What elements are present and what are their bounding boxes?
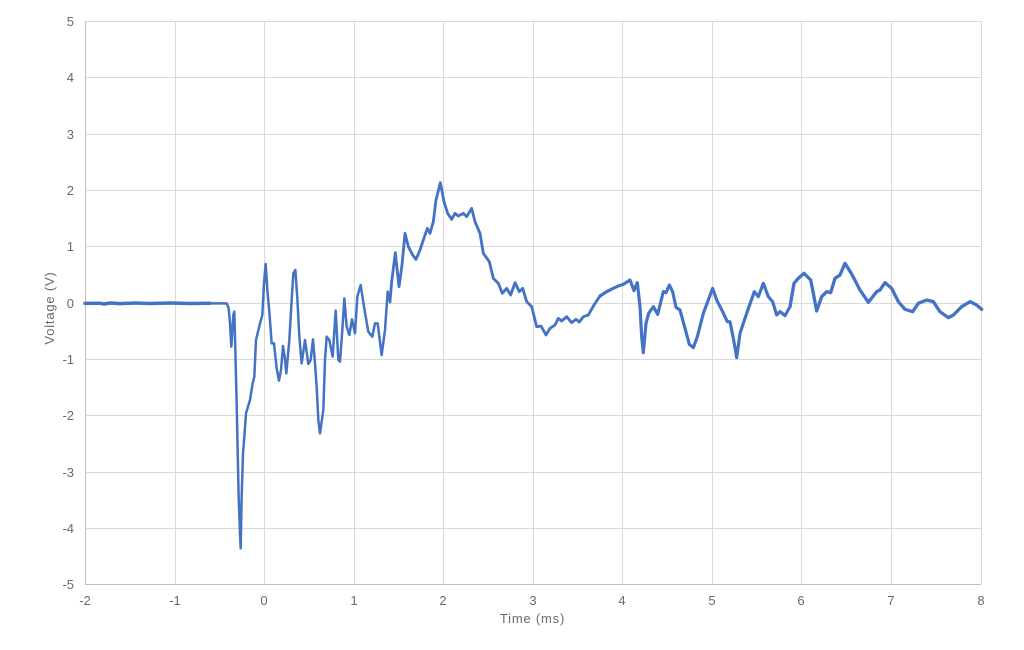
x axis tick labels: 6 <box>797 593 805 608</box>
y axis tick labels: 3 <box>67 127 74 142</box>
y axis tick labels: -5 <box>62 577 74 592</box>
x axis tick labels: 5 <box>708 593 716 608</box>
x axis tick labels: 1 <box>350 593 358 608</box>
x axis tick labels: 8 <box>977 593 985 608</box>
y axis tick labels: -3 <box>62 465 74 480</box>
x axis tick labels: -1 <box>169 593 181 608</box>
y axis tick labels: 1 <box>67 239 74 254</box>
x axis tick labels: 7 <box>887 593 895 608</box>
x axis title: Time (ms) <box>500 611 565 626</box>
y axis title: Voltage (V) <box>42 271 57 345</box>
y axis tick labels: 5 <box>67 14 74 29</box>
x axis tick labels: 3 <box>529 593 537 608</box>
data series: voltage trace <box>85 183 982 548</box>
x axis tick labels: 2 <box>439 593 447 608</box>
y axis tick labels <box>62 14 74 592</box>
y axis tick labels: -2 <box>62 408 74 423</box>
x axis tick labels: 0 <box>260 593 268 608</box>
y axis tick labels: 2 <box>67 183 74 198</box>
x axis tick labels: -2 <box>79 593 91 608</box>
y axis tick labels: 4 <box>67 70 74 85</box>
y axis tick labels: 0 <box>67 296 74 311</box>
y axis tick labels: -1 <box>62 352 74 367</box>
x axis tick labels: 4 <box>618 593 626 608</box>
y axis tick labels: -4 <box>62 521 74 536</box>
x axis tick labels <box>79 593 985 608</box>
